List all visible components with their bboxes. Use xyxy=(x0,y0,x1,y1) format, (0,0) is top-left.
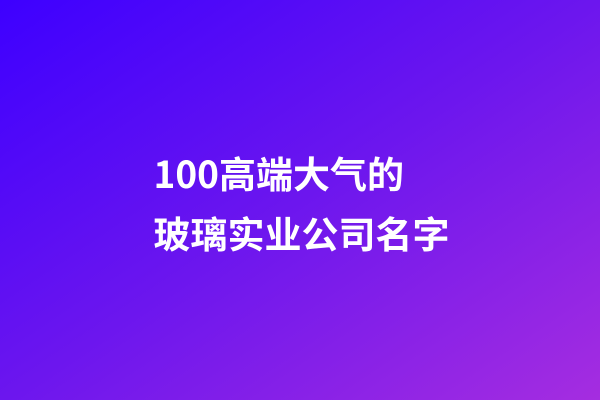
title xyxy=(154,144,450,258)
title line 1: 100高端大气的 xyxy=(154,144,404,198)
title line 2: 玻璃实业公司名字 xyxy=(154,204,450,258)
